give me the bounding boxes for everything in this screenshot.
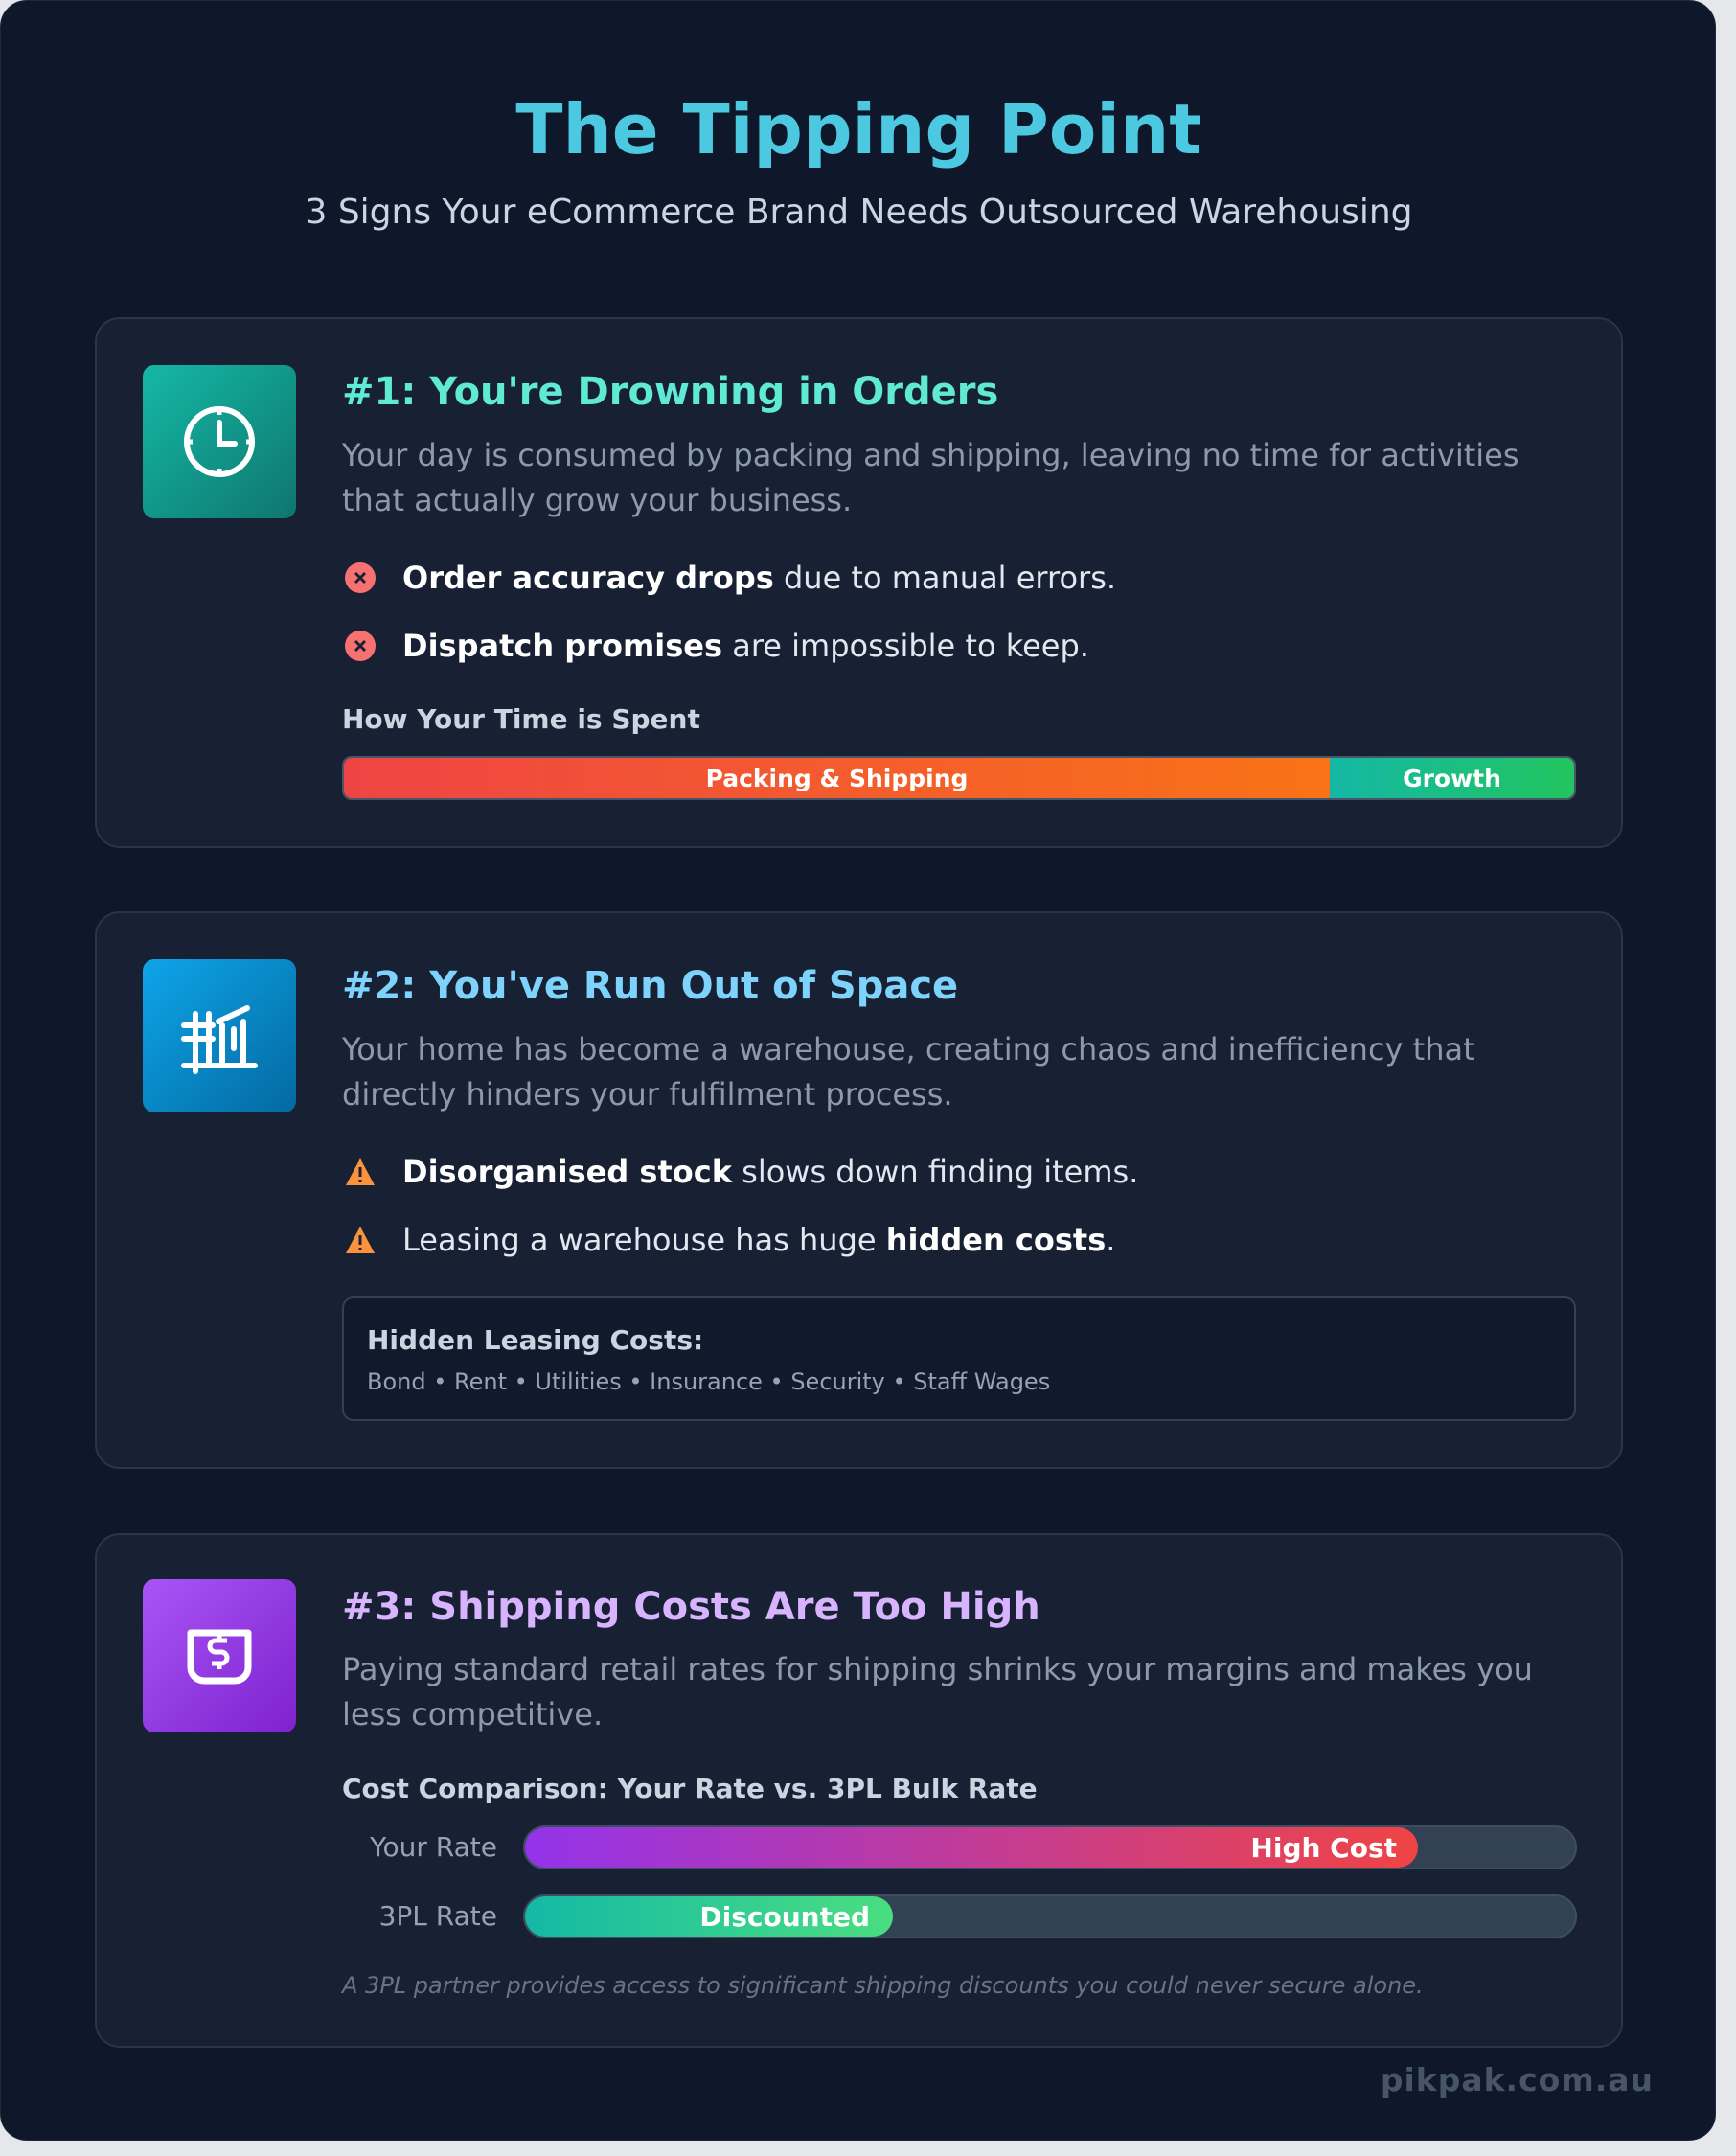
panel: drowning in orders [95, 317, 1623, 848]
bullet: hidden costs: Leasing a warehouse has huge hidden costs. [402, 1222, 1115, 1258]
heading: #1: You're Drowning in Orders [342, 370, 998, 414]
footer brand: pikpak.com.au [1381, 2061, 1654, 2099]
chart label: Cost Comparison: Your Rate vs. 3PL Bulk Rate [342, 1773, 1038, 1804]
icon: warehouse [143, 959, 296, 1112]
heading: #2: You've Run Out of Space [342, 964, 958, 1008]
bar chart: time spent: Packing & Shipping [706, 765, 968, 791]
heading: #3: Shipping Costs Are Too High [342, 1585, 1040, 1629]
description: Your day is consumed by packing and shipping, leaving no time for activities that actually grow your business. [342, 437, 1519, 518]
description: Your home has become a warehouse, creating chaos and inefficiency that directly hinders your fulfilment process. [342, 1031, 1475, 1112]
icon: money bag [143, 1579, 296, 1732]
bullet: order accuracy: Order accuracy drops due to manual errors. [402, 560, 1116, 596]
footnote: A 3PL partner provides access to significant shipping discounts you could never secure alone. [342, 1972, 1424, 1999]
bar chart: rate comparison: Discounted [699, 1901, 870, 1932]
description: Paying standard retail rates for shipping shrinks your margins and makes you less competitive. [342, 1651, 1533, 1732]
bar chart: rate comparison: Your Rate [370, 1831, 497, 1863]
callout: hidden leasing costs [342, 1296, 1576, 1421]
bar chart: time spent: Growth [1403, 765, 1501, 791]
callout: hidden leasing costs: Bond • Rent • Utilities • Insurance • Security • Staff Wages [367, 1368, 1050, 1395]
bar chart: rate comparison [370, 1825, 1577, 1938]
bullet: disorganised: Disorganised stock slows down finding items. [402, 1154, 1138, 1190]
callout: hidden leasing costs: Hidden Leasing Costs: [367, 1324, 703, 1356]
panel: shipping costs [95, 1533, 1623, 2048]
bar chart: time spent [342, 756, 1576, 800]
icon: clock [143, 365, 296, 518]
title: The Tipping Point [515, 89, 1202, 170]
panel: out of space [95, 911, 1623, 1469]
bullet: dispatch: Dispatch promises are impossible to keep. [402, 628, 1089, 664]
bar chart: rate comparison: 3PL Rate [379, 1900, 497, 1932]
bar chart: rate comparison: High Cost [1250, 1832, 1397, 1863]
bar label: How Your Time is Spent [342, 703, 700, 735]
subtitle: 3 Signs Your eCommerce Brand Needs Outsourced Warehousing [305, 193, 1412, 232]
